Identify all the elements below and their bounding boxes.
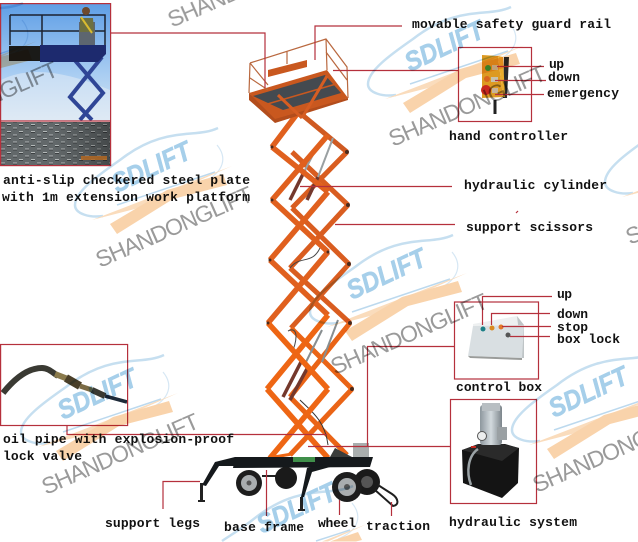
base frame chassis [202,443,373,497]
inset photo: oil pipe with valve [3,368,127,402]
label: hand controller up: up [549,57,564,72]
watermarks: SDLIFT [53,362,144,425]
hydraulic system device [462,403,519,498]
watermarks: SHANDONGLIFT [92,181,257,273]
label: extension platform: with 1m extension work platform [2,190,250,205]
label: box lock: box lock [557,332,620,347]
front scissor frame [267,77,328,458]
platform deck [249,70,348,123]
label: hydraulic cylinder: hydraulic cylinder [464,178,607,193]
watermarks: SDLIFT [107,135,198,198]
inset photo: platform extension and checkered plate [1,4,110,165]
joint caps [266,146,354,391]
watermarks: SDLIFT [400,14,491,77]
traction bar [375,485,397,506]
label: movable safety guard rail: movable safety guard rail [412,17,611,32]
label: hand controller down: down [548,70,580,85]
wheels [236,467,380,502]
label: support scissors: support scissors [466,220,593,235]
label: wheel: wheel [318,516,356,531]
label: control box up: up [557,287,572,302]
guard rail [249,39,348,98]
watermarks: SDLIFT [252,476,343,539]
label: anti-slip plate: anti-slip checkered steel plate [3,173,250,188]
label: stop: stop [557,320,588,335]
hand controller device [481,55,509,114]
label: emergency: emergency [547,86,619,101]
label: base frame: base frame [224,520,304,535]
label: hand controller: hand controller [449,129,568,144]
label: control box down: down [557,307,588,322]
scissor lift machine [198,39,397,511]
watermarks: SHANDONGLIFT [327,288,492,380]
control box device [468,316,524,360]
support legs [198,483,305,511]
label: hydraulic system: hydraulic system [449,515,577,530]
hoses and cylinders [283,138,338,445]
watermarks: SHANDONGLIFT [385,60,550,152]
label: control box: control box [456,380,542,395]
label: oil pipe: oil pipe with explosion-proof [3,432,234,447]
label: support legs: support legs [105,516,200,531]
back scissor frame [290,113,352,455]
label: traction: traction [366,519,430,534]
label: lock valve: lock valve [3,449,82,464]
watermarks: SDLIFT [342,242,433,305]
watermarks: SHANDONGLIFT [38,408,203,500]
